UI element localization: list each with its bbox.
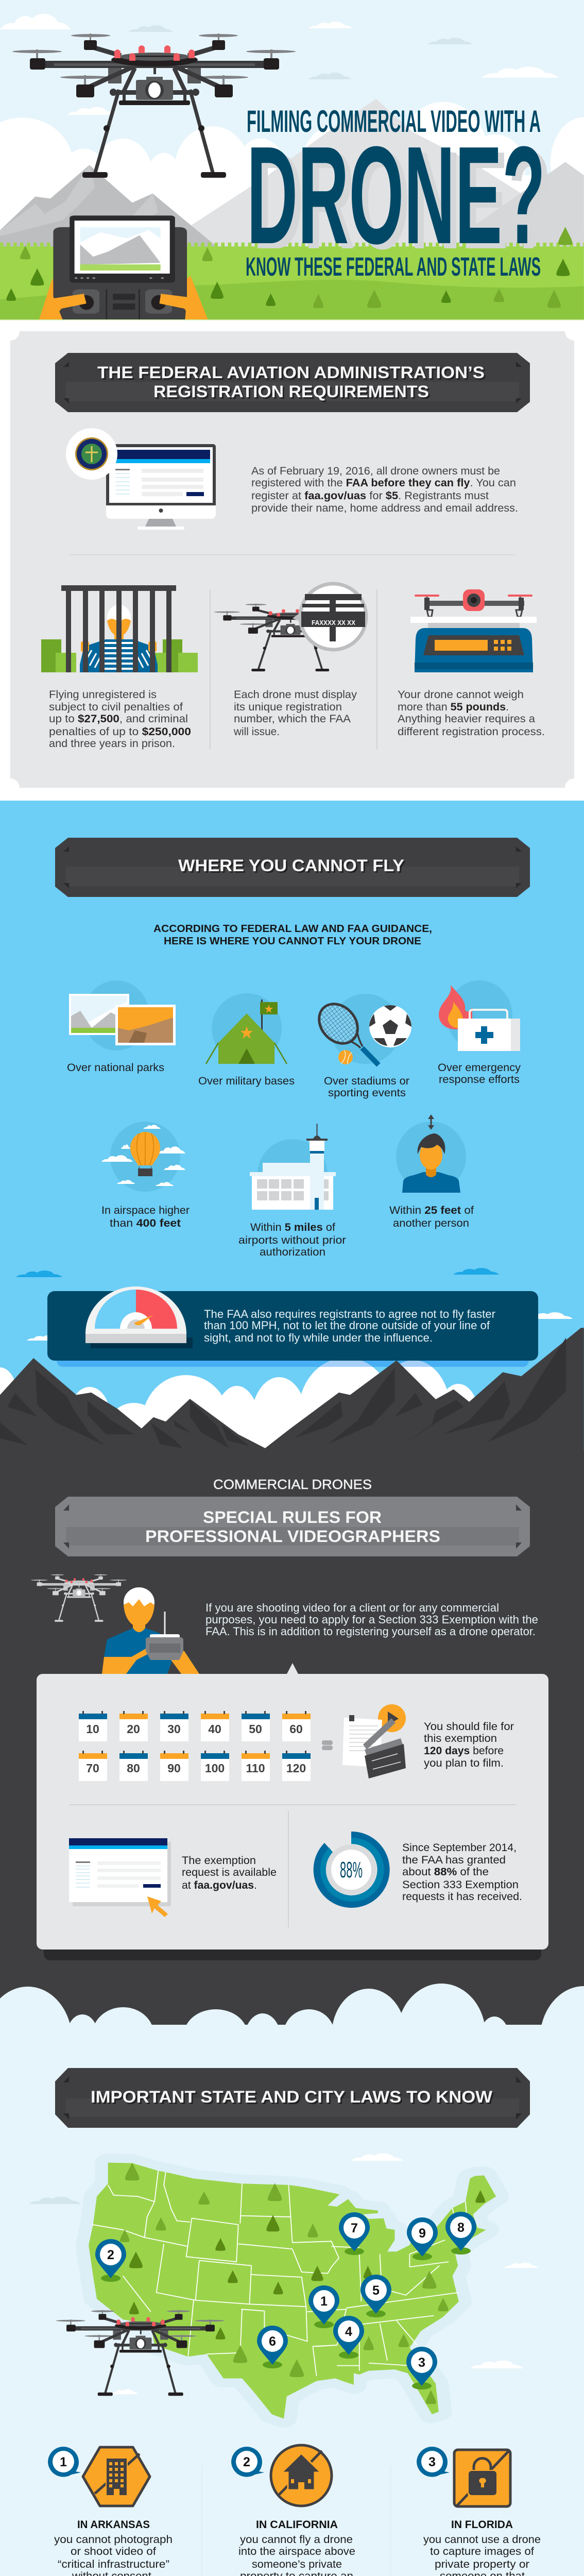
text: registration number: its unique registration — [234, 701, 342, 713]
text: penalties — [49, 689, 191, 750]
label: sporting events — [328, 1087, 406, 1099]
number badge — [48, 2447, 81, 2477]
text: section 333 intro: FAA. This is in addition to registering yourself as a drone operator. — [205, 1625, 536, 1638]
text: weight limit — [398, 689, 545, 738]
text: registration number — [233, 689, 357, 738]
body — [238, 2534, 355, 2576]
heading: IN CALIFORNIA — [256, 2519, 338, 2531]
icon: drone with magnified registration number — [214, 584, 367, 671]
decorative clouds — [16, 1268, 573, 1341]
panel: registration requirements — [0, 319, 584, 788]
text: 88% granted: about 88% of the — [402, 1866, 489, 1878]
map pins: 9 — [419, 2226, 426, 2241]
body: or shoot video of — [71, 2546, 156, 2557]
map pins: 2 — [107, 2248, 114, 2262]
text: 88% granted: the FAA has granted — [402, 1854, 506, 1866]
banner heading — [55, 2068, 530, 2128]
body: someone’s private — [252, 2558, 342, 2570]
icon: prisoner behind bars with money — [41, 585, 198, 672]
body — [423, 2534, 541, 2576]
text: 88% granted — [402, 1842, 522, 1903]
map pins: 6 — [269, 2334, 276, 2349]
calendar row 2: 90 — [167, 1761, 181, 1775]
banner heading: IMPORTANT STATE AND CITY LAWS TO KNOW — [91, 2088, 493, 2106]
hero section — [0, 0, 584, 319]
calendar row 1: 40 — [208, 1722, 221, 1736]
label: Over national parks — [67, 1062, 164, 1074]
icon: exemption form — [69, 1838, 171, 1917]
text: subheading: HERE IS WHERE YOU CANNOT FLY YOUR DRONE — [164, 936, 421, 947]
calendar row 2 — [79, 1751, 311, 1781]
text: speed rules: sight, and not to fly while under the influence. — [204, 1331, 433, 1344]
state borders — [92, 2171, 467, 2376]
icon: small drone on scale — [410, 589, 537, 672]
banner heading: REGISTRATION REQUIREMENTS — [153, 382, 429, 401]
text: registration intro: register at faa.gov/uas for $5. Registrants must — [251, 490, 489, 502]
banner heading: WHERE YOU CANNOT FLY — [178, 856, 404, 875]
text: exemption request: at faa.gov/uas. — [182, 1879, 257, 1891]
icon: paperwork and clapperboard — [342, 1704, 406, 1778]
body — [54, 2534, 173, 2576]
body: into the airspace above — [238, 2546, 355, 2557]
icon: drone with magnified registration number: FAXXXX XX XX — [312, 619, 355, 626]
title — [246, 104, 552, 281]
white clouds behind mountains — [0, 1358, 479, 1469]
cloud transition — [0, 1984, 584, 2094]
body: private property or — [435, 2558, 529, 2570]
calendar row 2: 70 — [86, 1761, 99, 1775]
text: exemption request: The exemption — [182, 1855, 256, 1867]
text: penalties: up to $27,500, and criminal — [49, 713, 188, 725]
text: weight limit: Anything heavier requires a — [398, 713, 535, 725]
number badge — [417, 2447, 450, 2477]
calendar row 1: 60 — [289, 1722, 303, 1736]
panel: exemption details — [37, 1663, 548, 1950]
icon: person with distance arrow — [396, 1114, 466, 1193]
label — [438, 1062, 521, 1086]
calendar row 2: 80 — [127, 1761, 140, 1775]
number badge — [231, 2447, 264, 2477]
panel: speed gauge callout — [47, 1286, 538, 1367]
label — [389, 1205, 474, 1229]
icon: sports — [311, 994, 411, 1065]
calendar row 2: 110 — [246, 1761, 265, 1775]
clouds around map — [29, 2153, 539, 2394]
text: exemption request — [182, 1855, 277, 1891]
text: weight limit: Your drone cannot weigh — [398, 689, 524, 701]
map pins: 3 — [418, 2355, 425, 2370]
text: file 120 days — [424, 1721, 514, 1769]
landscape — [0, 99, 584, 319]
label: Over military bases — [198, 1075, 295, 1087]
text: section 333 intro: If you are shooting video for a client or for any commercial — [205, 1601, 499, 1614]
label: Within 5 miles of — [250, 1222, 335, 1233]
calendar row 1: 50 — [249, 1722, 262, 1736]
text: subheading: ACCORDING TO FEDERAL LAW AND FAA GUIDANCE, — [153, 923, 432, 935]
label: Over emergency — [438, 1062, 521, 1074]
text: registration intro: registered with the FAA before they can fly . You can — [251, 477, 516, 489]
panel: where you cannot fly — [0, 801, 584, 1469]
label: than 400 feet — [110, 1217, 181, 1229]
calendars — [79, 1711, 311, 1781]
text: registration number: Each drone must display — [234, 689, 357, 701]
label: In airspace higher — [101, 1205, 190, 1216]
text: registration intro: provide their name, home address and email address. — [251, 502, 518, 514]
banner heading — [55, 1497, 530, 1556]
text: 88% granted: Section 333 Exemption — [402, 1879, 519, 1891]
rule 3: Florida — [417, 2447, 541, 2576]
banner heading: THE FEDERAL AVIATION ADMINISTRATION’S — [97, 363, 485, 382]
icon: operator with controller — [102, 1587, 199, 1674]
text: exemption request: request is available — [182, 1867, 277, 1878]
label: another person — [393, 1217, 469, 1229]
text: registration number: will issue. — [233, 726, 280, 738]
body: you cannot use a drone — [423, 2534, 541, 2546]
text: weight limit: more than 55 pounds. — [398, 701, 509, 713]
icon: emergency response — [439, 980, 520, 1051]
icon: tablet controller with hands — [39, 215, 208, 319]
number badge: 1 — [60, 2455, 67, 2469]
icon: padlock — [454, 2450, 510, 2506]
text: file 120 days: You should file for — [424, 1721, 514, 1733]
text: penalties: Flying unregistered is — [49, 689, 157, 701]
text: section 333 intro: purposes, you need to apply for a Section 333 Exemption with the — [205, 1613, 538, 1626]
label: Over stadiums or — [324, 1075, 409, 1087]
body: you cannot photograph — [54, 2534, 173, 2546]
label: airports without prior — [238, 1234, 346, 1246]
calendar row 1 — [79, 1711, 311, 1741]
text: registration intro: As of February 19, 2016, all drone owners must be — [251, 465, 500, 477]
rule 2: California — [231, 2445, 355, 2576]
label — [324, 1075, 409, 1099]
icon: house — [271, 2445, 332, 2506]
body: to capture images of — [430, 2546, 534, 2557]
icon: hero drone — [12, 33, 296, 178]
panel: commercial drones — [0, 1328, 584, 2038]
calendar row 2: 100 — [205, 1761, 225, 1775]
icon: building — [83, 2447, 150, 2506]
small sky clouds — [0, 14, 559, 115]
icon: balloon — [101, 1122, 185, 1192]
banner heading: PROFESSIONAL VIDEOGRAPHERS — [145, 1527, 440, 1546]
chart: 88% donut: 88% — [340, 1857, 363, 1883]
text: registration number: number, which the FAA — [234, 713, 351, 725]
number badge: 3 — [428, 2455, 436, 2469]
label: Within 25 feet of — [389, 1205, 474, 1216]
text: section 333 intro — [205, 1601, 538, 1638]
calendar row 2: 120 — [286, 1761, 306, 1775]
calendar row 1: 20 — [127, 1722, 140, 1736]
icon: speedometer — [85, 1286, 193, 1348]
label: response efforts — [439, 1074, 520, 1086]
chart: 88% donut — [314, 1832, 390, 1908]
text: file 120 days: 120 days before — [424, 1745, 504, 1757]
heading: IN FLORIDA — [451, 2519, 513, 2531]
body: you cannot fly a drone — [240, 2534, 353, 2546]
dark mountains — [0, 1328, 584, 1456]
label — [238, 1222, 346, 1258]
text: penalties: penalties of up to $250,000 — [49, 726, 191, 738]
text: file 120 days: this exemption — [424, 1733, 497, 1744]
text: speed rules: than 100 MPH, not to let the drone outside of your line of — [204, 1319, 490, 1332]
icon: airport — [250, 1124, 336, 1210]
text: registration intro — [251, 465, 518, 514]
map trees — [120, 2163, 485, 2404]
icon: map drone — [56, 2310, 225, 2396]
map pins: 8 — [457, 2221, 465, 2235]
text: penalties: subject to civil penalties of — [49, 701, 183, 713]
map: United States — [89, 2163, 496, 2419]
map pins: 4 — [345, 2325, 352, 2339]
icon: national parks — [69, 980, 176, 1050]
text: speed rules — [204, 1308, 495, 1344]
banner heading — [55, 353, 530, 412]
text: 88% granted: Since September 2014, — [402, 1842, 517, 1854]
body: “critical infrastructure” — [58, 2558, 169, 2570]
heading: IN ARKANSAS — [77, 2519, 150, 2531]
label — [101, 1205, 190, 1229]
banner heading: SPECIAL RULES FOR — [203, 1508, 382, 1527]
map pins: 7 — [351, 2221, 358, 2235]
map pins — [95, 2212, 476, 2389]
number badge: 2 — [243, 2455, 250, 2469]
label: authorization — [260, 1246, 325, 1258]
text: penalties: and three years in prison. — [49, 738, 175, 750]
text: subheading — [153, 923, 432, 947]
heading: commercial drones: COMMERCIAL DRONES — [213, 1477, 372, 1492]
text: weight limit: different registration process. — [398, 726, 545, 738]
icon: military tent — [206, 993, 287, 1064]
icon: gray drone — [31, 1574, 127, 1622]
text: 88% granted: requests it has received. — [402, 1891, 522, 1903]
panel: state and city laws — [0, 1984, 584, 2576]
calendar row 1: 10 — [86, 1722, 99, 1736]
text: file 120 days: you plan to film. — [424, 1757, 504, 1769]
equals sign — [322, 1740, 333, 1750]
text: speed rules: The FAA also requires registrants to agree not to fly faster — [204, 1308, 495, 1320]
icon: computer with FAA seal — [66, 428, 216, 530]
calendar row 1: 30 — [167, 1722, 181, 1736]
rule 1: Arkansas — [48, 2447, 173, 2576]
map pins: 5 — [372, 2283, 380, 2298]
map pins: 1 — [320, 2294, 328, 2309]
banner heading — [55, 838, 530, 897]
